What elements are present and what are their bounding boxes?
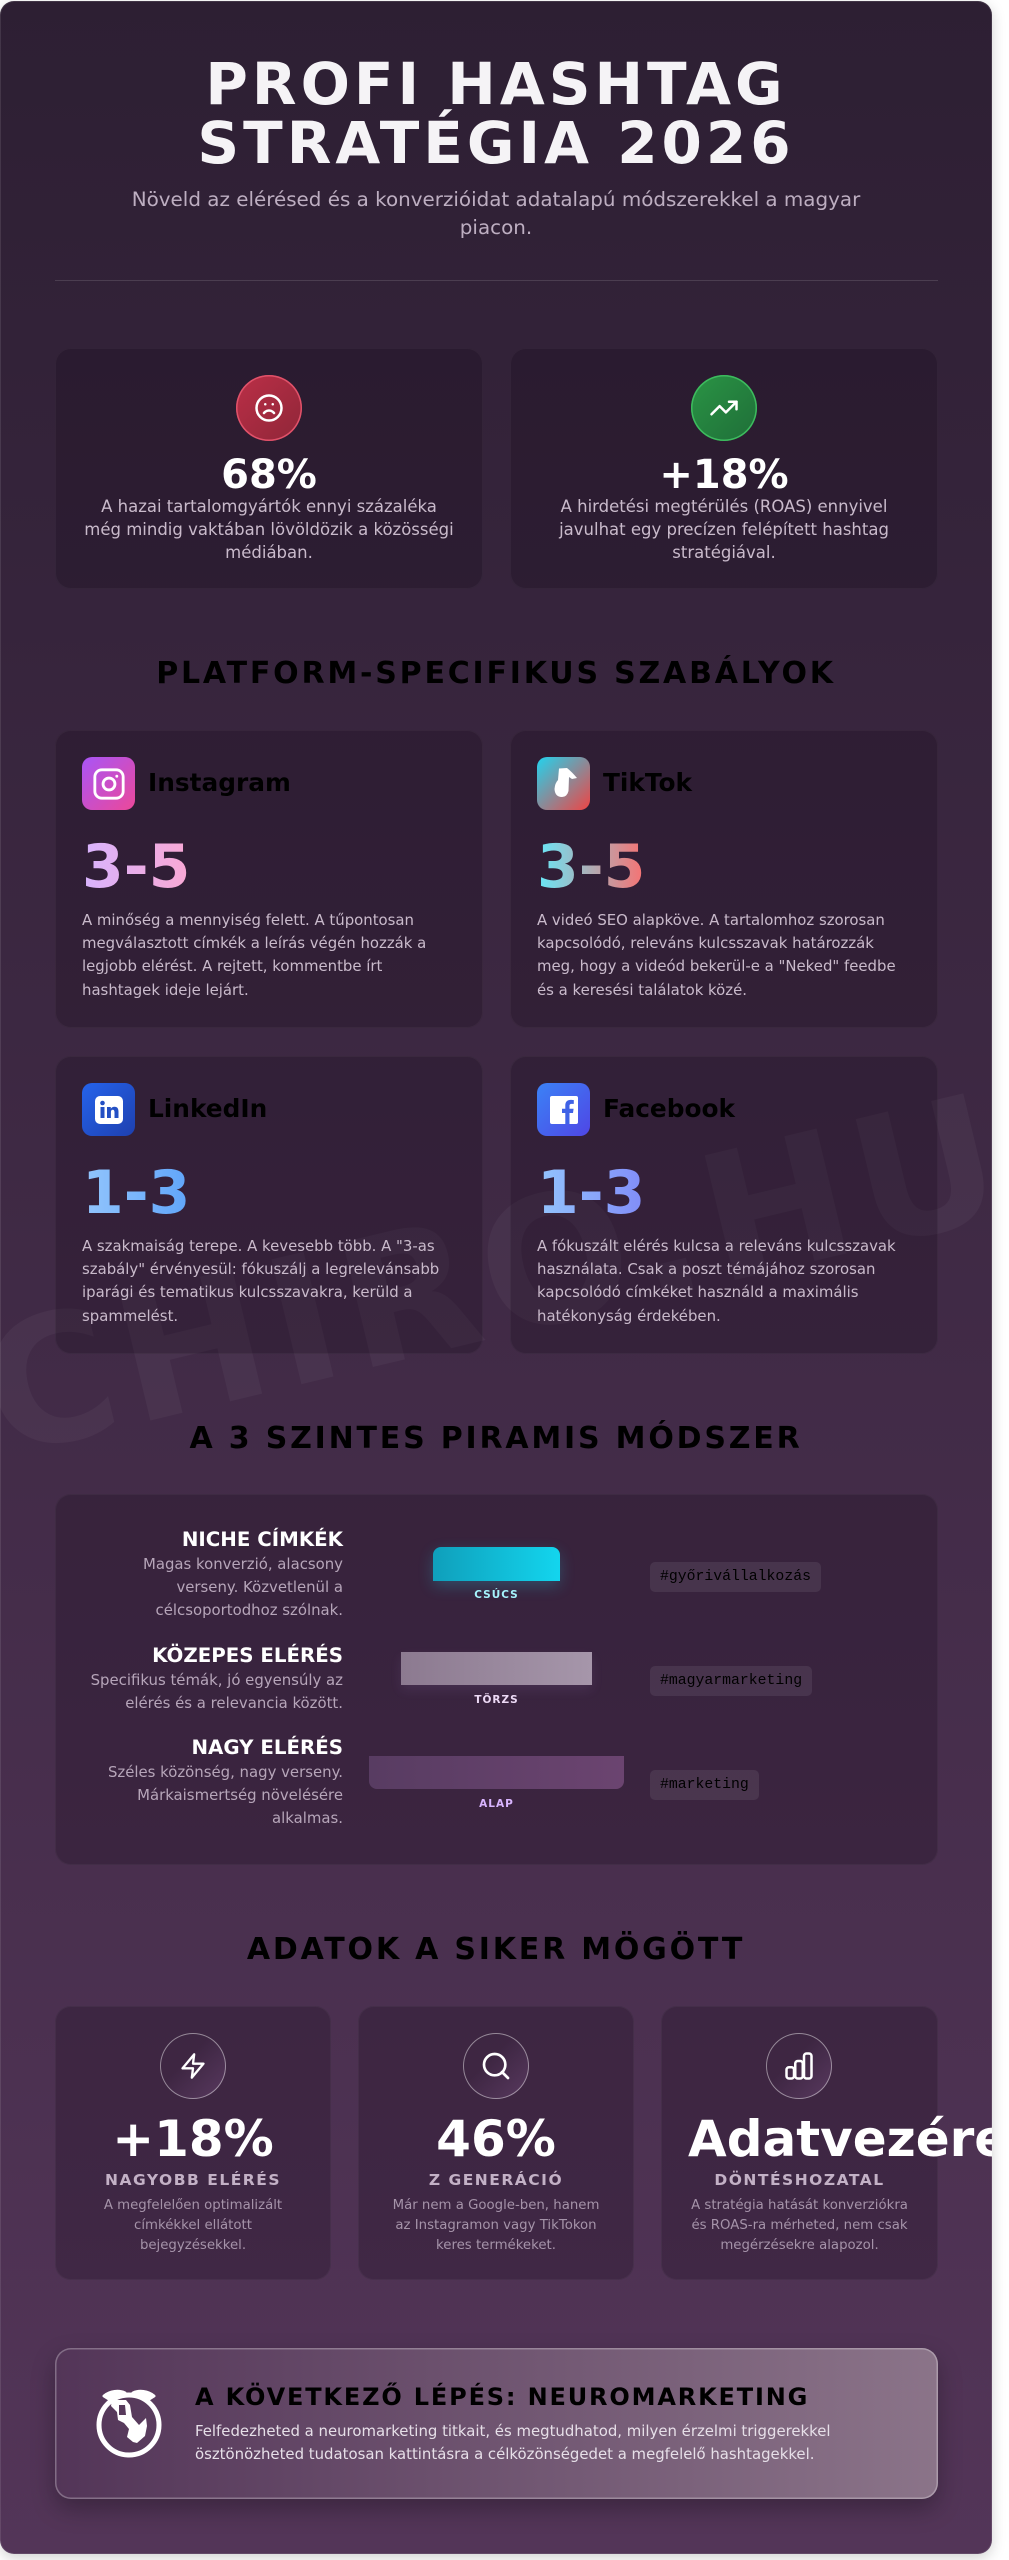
panel: data generation (358, 2006, 634, 2280)
data description (393, 2198, 599, 2252)
pyramid level: medium: elérés és a relevancia között. (125, 1694, 343, 1712)
label: middle: TÖRZS (474, 1694, 519, 1706)
title: STRATÉGIA 2026 (197, 109, 795, 177)
platform description: használata. Csak a poszt témájához szorosan (537, 1260, 876, 1278)
heading: platform rules: PLATFORM-SPECIFIKUS SZABÁLYOK (156, 656, 836, 691)
stat description (558, 497, 889, 562)
panel: TikTok (510, 730, 938, 1028)
platform description: és a keresési találatok közé. (537, 981, 747, 999)
data description (104, 2198, 282, 2252)
hashtag tag: medium: #magyarmarketing (660, 1673, 802, 1689)
platform description: legjobb elérést. A rejtett, kommentbe írt (82, 957, 382, 975)
platform description (82, 1237, 439, 1325)
callout: next step (55, 2348, 938, 2499)
platform description: hatékonyság érdekében. (537, 1307, 721, 1325)
data description: címkékkel ellátott (134, 2218, 252, 2232)
icon: search (463, 2033, 529, 2099)
hashtag tag: medium (650, 1666, 812, 1696)
data description: keres termékeket. (436, 2238, 556, 2252)
pyramid level: broad: alkalmas. (272, 1809, 343, 1827)
data description: bejegyzésekkel. (140, 2238, 246, 2252)
platform description (537, 911, 896, 999)
pyramid bar: base (369, 1756, 624, 1789)
pyramid level: broad: Márkaismertség növelésére (137, 1786, 343, 1804)
data label: Z GENERÁCIÓ (429, 2171, 563, 2189)
platform description: iparági és tematikus kulcsszavakra, kerüld a (82, 1283, 413, 1301)
icon: trending up (691, 375, 757, 441)
icon: TikTok (537, 757, 590, 810)
platform description (82, 911, 426, 999)
hashtag tag: niche: #győrivállalkozás (660, 1569, 811, 1585)
platform description: A szakmaiság terepe. A kevesebb több. A "3-as (82, 1237, 435, 1255)
platform description: hashtagek ideje lejárt. (82, 981, 249, 999)
platform description: szabály" érvényesül: fókuszálj a legrelevánsabb (82, 1260, 439, 1278)
data description: az Instagramon vagy TikTokon (395, 2218, 597, 2232)
callout text: Felfedezheted a neuromarketing titkait, és megtudhatod, milyen érzelmi triggerekkel (195, 2422, 831, 2440)
stat description: A hirdetési megtérülés (ROAS) ennyivel (561, 497, 887, 516)
icon: bar chart (766, 2033, 832, 2099)
platform description: A fókuszált elérés kulcsa a releváns kulcsszavak (537, 1237, 896, 1255)
platform name: LinkedIn (148, 1094, 267, 1123)
data value: +18% (112, 2110, 274, 2168)
platform description: A videó SEO alapköve. A tartalomhoz szorosan (537, 911, 885, 929)
pyramid level: broad: Széles közönség, nagy verseny. (108, 1763, 343, 1781)
pyramid level: niche: Magas konverzió, alacsony (143, 1555, 343, 1573)
stat number: +18% (659, 452, 789, 498)
icon: alarm brain (96, 2390, 162, 2458)
pyramid level: niche: verseny. Közvetlenül a (176, 1578, 343, 1596)
hashtag tag: niche (650, 1562, 821, 1592)
hashtag count: 3-5 (537, 832, 645, 902)
pyramid bar: middle (401, 1652, 592, 1685)
subtitle (132, 188, 860, 238)
stat description: A hazai tartalomgyártók ennyi százaléka (101, 497, 437, 516)
heading: pyramid: A 3 SZINTES PIRAMIS MÓDSZER (190, 1421, 802, 1456)
stat description: még mindig vaktában lövöldözik a közösségi (84, 520, 454, 539)
platform description: megválasztott címkék a leírás végén hozzák a (82, 934, 426, 952)
pyramid level: medium (91, 1644, 343, 1712)
pyramid level: niche: NICHE CÍMKÉK (182, 1528, 343, 1551)
panel: stat +18% (510, 348, 938, 589)
hashtag tag: broad: #marketing (660, 1777, 749, 1793)
pyramid level: broad (108, 1736, 343, 1827)
platform name: Instagram (148, 768, 291, 797)
panel: Instagram (55, 730, 483, 1028)
pyramid level: medium: Specifikus témák, jó egyensúly az (91, 1671, 343, 1689)
platform name: Facebook (603, 1094, 735, 1123)
platform description: kapcsolódó címkéket használd a maximális (537, 1283, 859, 1301)
icon: Instagram (82, 757, 135, 810)
callout text: ösztönözheted tudatosan kattintásra a célközönségedet a megfelelő hashtagekkel. (195, 2445, 814, 2463)
data description: Már nem a Google-ben, hanem (393, 2198, 599, 2212)
stat description (84, 497, 454, 562)
callout text (195, 2422, 831, 2463)
panel: LinkedIn (55, 1056, 483, 1354)
platform description: spammelést. (82, 1307, 178, 1325)
panel: pyramid (55, 1494, 938, 1865)
stat number: 68% (221, 452, 317, 498)
icon: lightning (160, 2033, 226, 2099)
title: PROFI HASHTAG (205, 50, 787, 118)
title (197, 50, 795, 177)
data description: megérzésekre alapozol. (720, 2238, 879, 2252)
pyramid bar: top (433, 1547, 560, 1581)
hashtag tag: broad (650, 1770, 759, 1800)
label: top: CSÚCS (474, 1589, 519, 1601)
platform description: kapcsolódó, releváns kulcsszavak határozzák (537, 934, 874, 952)
label: base: ALAP (479, 1798, 514, 1810)
panel: data driven (661, 2006, 938, 2280)
hashtag count: 3-5 (82, 832, 190, 902)
platform description: meg, hogy a videód bekerül-e a "Neked" feedbe (537, 957, 896, 975)
data description (691, 2198, 908, 2252)
icon: LinkedIn (82, 1083, 135, 1136)
data value: 46% (436, 2110, 556, 2168)
data description: A megfelelően optimalizált (104, 2198, 282, 2212)
data label: NAGYOBB ELÉRÉS (105, 2171, 281, 2189)
platform description: A minőség a mennyiség felett. A tűpontosan (82, 911, 414, 929)
hashtag count: 1-3 (537, 1158, 645, 1228)
icon: Facebook (537, 1083, 590, 1136)
icon: sad face (236, 375, 302, 441)
data description: A stratégia hatását konverziókra (691, 2198, 908, 2212)
panel: Facebook (510, 1056, 938, 1354)
platform name: TikTok (603, 768, 692, 797)
hashtag count: 1-3 (82, 1158, 190, 1228)
panel: stat 68% (55, 348, 483, 589)
panel: data reach (55, 2006, 331, 2280)
pyramid level: broad: NAGY ELÉRÉS (192, 1736, 343, 1759)
stat description: javulhat egy precízen felépített hashtag (559, 520, 889, 539)
pyramid level: niche (143, 1528, 344, 1619)
data description: és ROAS-ra mérheted, nem csak (691, 2218, 908, 2232)
heading: data: ADATOK A SIKER MÖGÖTT (247, 1932, 745, 1967)
data label: DÖNTÉSHOZATAL (714, 2171, 885, 2189)
stat description: médiában. (225, 543, 313, 562)
platform description (537, 1237, 896, 1325)
subtitle: Növeld az elérésed és a konverzióidat adatalapú módszerekkel a magyar (132, 188, 860, 211)
pyramid level: medium: KÖZEPES ELÉRÉS (152, 1644, 343, 1667)
pyramid level: niche: célcsoportodhoz szólnak. (156, 1601, 343, 1619)
subtitle: piacon. (460, 216, 532, 238)
callout title: A KÖVETKEZŐ LÉPÉS: NEUROMARKETING (195, 2382, 809, 2410)
stat description: stratégiával. (672, 543, 776, 562)
